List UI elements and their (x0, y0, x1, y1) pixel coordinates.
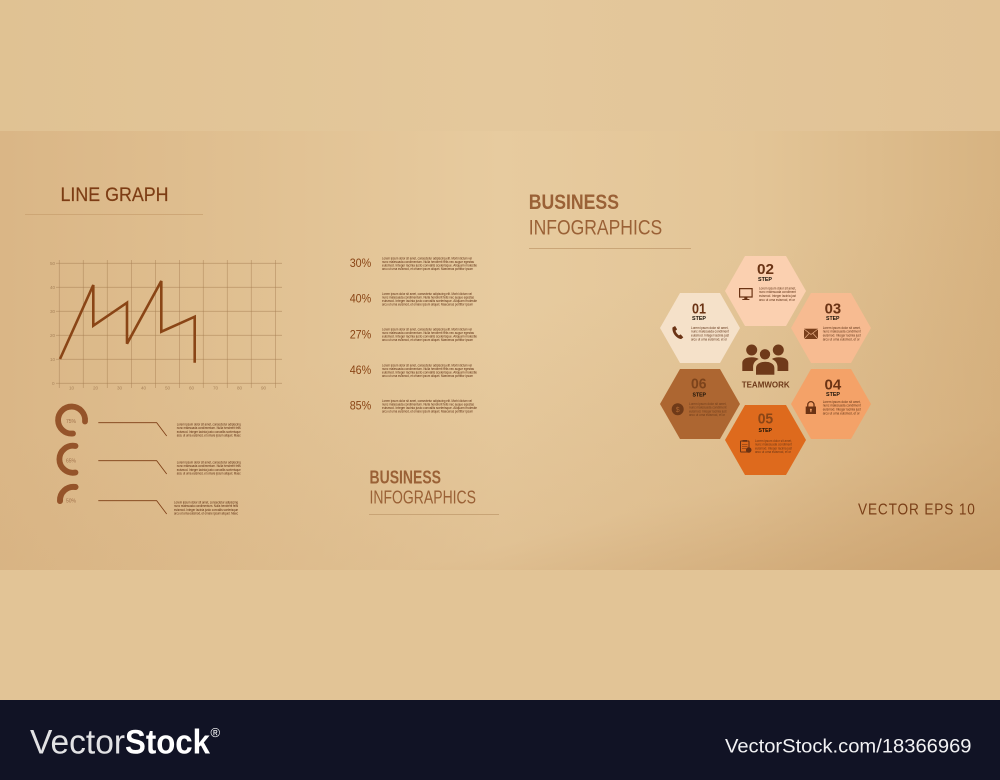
hexagon step 05: STEP (758, 428, 772, 434)
line chart: 10 (69, 386, 75, 390)
percentage row 85%: 85% (350, 401, 371, 413)
hexagon step 01: Lorem ipsum dolor sit amet, (691, 326, 728, 330)
icon: clipboard with coin (740, 440, 752, 453)
line chart: 40 (141, 386, 147, 390)
heading: business infographics large: BUSINESS (529, 190, 619, 214)
hexagon step 05: arcu ut urna euismod, et or (755, 450, 792, 454)
line chart: 20 (50, 333, 56, 338)
donut 75% with callout: 75% (66, 419, 77, 425)
icon: dollar coin: $ (676, 407, 680, 414)
line chart: 30 (50, 309, 56, 314)
donut 65% with callout: 65% (66, 458, 77, 464)
percentage row 27%: nunc malesuada condimentum. Nulla hendrerit felis nec augue egestas (382, 331, 474, 335)
hexagon step 06: euismod. Integer lacinia just (689, 409, 727, 413)
hexagon step 05: 05 (758, 412, 773, 428)
percentage row 30%: arcu ut urna euismod, et ornare ipsum aliquet. Maecenas porttitor ipsum (382, 267, 473, 271)
hexagon step 06: nunc malesuada condiment (689, 406, 726, 410)
donut 75% with callout (58, 407, 241, 438)
line chart: 50 (50, 261, 56, 266)
hexagon step 06 (660, 369, 740, 439)
percentage row 46%: 46% (350, 365, 371, 377)
donut 75% with callout: nunc malesuada condimentum. Nulla hendrerit felis (177, 426, 241, 430)
label: teamwork: TEAMWORK (742, 380, 791, 390)
donut 65% with callout: arcu ut urna euismod, et ornare ipsum aliquet. Maec (177, 472, 241, 476)
hexagon step 02: STEP (758, 277, 772, 283)
icon: envelope (804, 329, 818, 339)
percentage row 85%: Lorem ipsum dolor sit amet, consectetur adipiscing elit. Morbi dictum vel (382, 399, 472, 403)
line chart: 30 (117, 386, 123, 390)
donut 50% with callout: nunc malesuada condimentum. Nulla hendrerit felis (174, 504, 238, 508)
hexagon step 06: STEP (692, 393, 706, 399)
hexagon step 03 (791, 293, 871, 363)
bottom band (0, 570, 1000, 700)
line chart: 50 (165, 386, 171, 390)
donut 65% with callout: nunc malesuada condimentum. Nulla hendrerit felis (177, 464, 241, 468)
hexagon step 03: nunc malesuada condiment (823, 330, 861, 334)
hexagon step 04: nunc malesuada condiment (823, 404, 861, 408)
percentage row 40%: 40% (350, 294, 371, 306)
heading: business infographics small: INFOGRAPHICS (370, 487, 476, 507)
hexagon step 02: euismod. Integer lacinia just (759, 294, 796, 298)
percentage row 27%: arcu ut urna euismod, et ornare ipsum aliquet. Maecenas porttitor ipsum (382, 338, 473, 342)
percentage row 40%: Lorem ipsum dolor sit amet, consectetur adipiscing elit. Morbi dictum vel (382, 292, 472, 296)
donut 50% with callout: arcu ut urna euismod, et ornare ipsum aliquet. Maec (174, 512, 238, 516)
percentage row 40%: euismod. Integer lacinia justo convallis scelerisque. Aliquam molestie (382, 299, 477, 303)
hexagon step 06: 06 (691, 376, 706, 392)
footer bar (0, 700, 1000, 780)
percentage row 27% (350, 328, 477, 342)
donut 50% with callout: Lorem ipsum dolor sit amet, consectetur adipiscing (174, 500, 238, 504)
label: vector eps 10: VECTOR EPS 10 (858, 501, 976, 518)
logo: vectorstock: Stock (125, 723, 211, 761)
percentage row 85%: nunc malesuada condimentum. Nulla hendrerit felis nec augue egestas (382, 402, 474, 406)
hexagon step 06: Lorem ipsum dolor sit amet, (689, 402, 726, 406)
hexagon step 01: 01 (692, 301, 706, 317)
hexagon step 02: arcu ut urna euismod, et or (759, 298, 796, 302)
donut 65% with callout: euismod. Integer lacinia justo convallis scelerisque (177, 468, 241, 472)
heading: business infographics large: INFOGRAPHICS (529, 215, 662, 239)
hexagon step 03: STEP (826, 316, 840, 322)
hexagon step 05: Lorem ipsum dolor sit amet, (755, 439, 792, 443)
heading: business infographics small: BUSINESS (370, 467, 441, 487)
central panel (0, 131, 1000, 570)
heading: business infographics small (369, 467, 499, 514)
percentage row 40%: arcu ut urna euismod, et ornare ipsum aliquet. Maecenas porttitor ipsum (382, 302, 473, 306)
percentage row 46% (350, 363, 477, 378)
line chart: 10 (50, 357, 56, 362)
line chart (50, 260, 282, 390)
hexagon step 03: Lorem ipsum dolor sit amet, (823, 326, 861, 330)
hexagon step 04: euismod. Integer lacinia just (823, 408, 861, 412)
hexagon step 04: 04 (824, 377, 841, 393)
hexagon step 03: arcu ut urna euismod, et or (823, 337, 860, 341)
icon: phone (672, 326, 683, 339)
percentage row 46%: Lorem ipsum dolor sit amet, consectetur adipiscing elit. Morbi dictum vel (382, 363, 472, 367)
data line (60, 281, 195, 363)
percentage row 40% (350, 292, 477, 306)
icon: lock (806, 401, 816, 414)
donut 65% with callout (59, 446, 241, 476)
hexagon step 01: nunc malesuada condiment (691, 330, 729, 334)
hexagon step 04: arcu ut urna euismod, et or (823, 411, 860, 415)
percentage row 85%: euismod. Integer lacinia justo convallis scelerisque. Aliquam molestie (382, 406, 477, 410)
hexagon step 06: arcu ut urna euismod, et or (689, 413, 726, 417)
hexagon step 03: 03 (825, 301, 841, 317)
logo: vectorstock (30, 723, 220, 761)
hexagon step 01: STEP (692, 316, 706, 322)
line chart: 60 (189, 386, 195, 390)
hexagon step 01: euismod. Integer lacinia just (691, 334, 729, 338)
line chart: 90 (261, 386, 267, 390)
hexagon step 03: euismod. Integer lacinia just (823, 334, 861, 338)
heading: business infographics large (529, 190, 691, 248)
percentage row 30%: nunc malesuada condimentum. Nulla hendrerit felis nec augue egestas (382, 260, 474, 264)
hexagon step 02 (725, 256, 806, 326)
percentage row 30%: Lorem ipsum dolor sit amet, consectetur adipiscing elit. Morbi dictum vel (382, 256, 472, 260)
hexagon step 01: arcu ut urna euismod, et or (691, 337, 728, 341)
donut 50% with callout: 50% (66, 498, 77, 504)
heading: line graph: LINE GRAPH (60, 184, 168, 206)
hexagon step 04: STEP (826, 392, 840, 398)
percentage row 46%: euismod. Integer lacinia justo convallis scelerisque. Aliquam molestie (382, 370, 477, 374)
donut 75% with callout: Lorem ipsum dolor sit amet, consectetur adipiscing (177, 422, 241, 426)
percentage row 30%: 30% (350, 258, 371, 270)
percentage row 40%: nunc malesuada condimentum. Nulla hendrerit felis nec augue egestas (382, 296, 474, 300)
donut 75% with callout: arcu ut urna euismod, et ornare ipsum aliquet. Maec (177, 434, 241, 438)
icon: teamwork people (742, 344, 788, 375)
top band (0, 0, 1000, 131)
percentage row 46%: arcu ut urna euismod, et ornare ipsum aliquet. Maecenas porttitor ipsum (382, 374, 473, 378)
logo: vectorstock: ® (210, 725, 220, 740)
logo: vectorstock: Vector (30, 723, 125, 761)
donut 75% with callout: euismod. Integer lacinia justo convallis scelerisque (177, 430, 241, 434)
hexagon step 05: euismod. Integer lacinia just (755, 446, 792, 450)
donut 50% with callout: euismod. Integer lacinia justo convallis scelerisque (174, 508, 238, 512)
percentage row 85%: arcu ut urna euismod, et ornare ipsum aliquet. Maecenas porttitor ipsum (382, 410, 473, 414)
percentage row 85% (350, 399, 477, 414)
icon: monitor (739, 288, 753, 300)
hexagon step 05: nunc malesuada condiment (755, 443, 792, 447)
hexagon step 02: nunc malesuada condiment (759, 290, 796, 294)
hexagon step 01 (660, 293, 740, 363)
percentage row 46%: nunc malesuada condimentum. Nulla hendrerit felis nec augue egestas (382, 367, 474, 371)
hexagon step 02: 02 (757, 262, 774, 278)
percentage row 30% (350, 256, 477, 271)
percentage row 27%: euismod. Integer lacinia justo convallis scelerisque. Aliquam molestie (382, 335, 477, 339)
line chart: 70 (213, 386, 219, 390)
donut 50% with callout (60, 487, 238, 516)
url: image id: VectorStock.com/18366969 (725, 735, 972, 757)
line chart: 40 (50, 285, 56, 290)
percentage row 30%: euismod. Integer lacinia justo convallis scelerisque. Aliquam molestie (382, 264, 477, 268)
donut 65% with callout: Lorem ipsum dolor sit amet, consectetur adipiscing (177, 460, 241, 464)
line chart: 20 (93, 386, 99, 390)
line chart: 0 (52, 381, 55, 386)
hexagon step 02: Lorem ipsum dolor sit amet, (759, 286, 796, 290)
hexagon step 04: Lorem ipsum dolor sit amet, (823, 400, 861, 404)
hexagon step 05 (725, 405, 806, 475)
line chart: 80 (237, 386, 243, 390)
hexagon step 04 (791, 369, 871, 439)
percentage row 27%: Lorem ipsum dolor sit amet, consectetur adipiscing elit. Morbi dictum vel (382, 328, 472, 332)
percentage row 27%: 27% (350, 329, 371, 341)
